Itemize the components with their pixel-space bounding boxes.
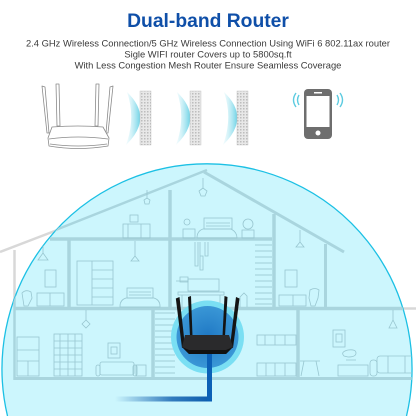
coverage dome [2,164,412,416]
network cable [115,350,212,402]
house outline outside dome [0,229,416,310]
house cutaway illustration [0,170,416,380]
staircases [155,245,272,373]
icon: wave and wall 2 [176,91,201,145]
description text: 2.4 GHz Wireless Connection/5 GHz Wireless Connection Using WiFi 6 802.11ax router [26,38,390,48]
description text: With Less Congestion Mesh Router Ensure Seamless Coverage [75,60,341,70]
signal through walls [126,91,248,145]
title: Dual-band Router [127,11,289,32]
router signal halo [171,300,244,374]
icon: wave and wall 3 [223,91,248,145]
icon: wave and wall 1 [126,91,151,145]
furniture and lamps [17,178,415,376]
description text [26,38,390,70]
black router [176,296,240,354]
icon: smartphone with signal [294,89,342,139]
description text: Sigle WIFI router Covers up to 5800sq.ft [124,48,292,60]
house structure [0,170,416,380]
icon: outline router [42,84,113,148]
